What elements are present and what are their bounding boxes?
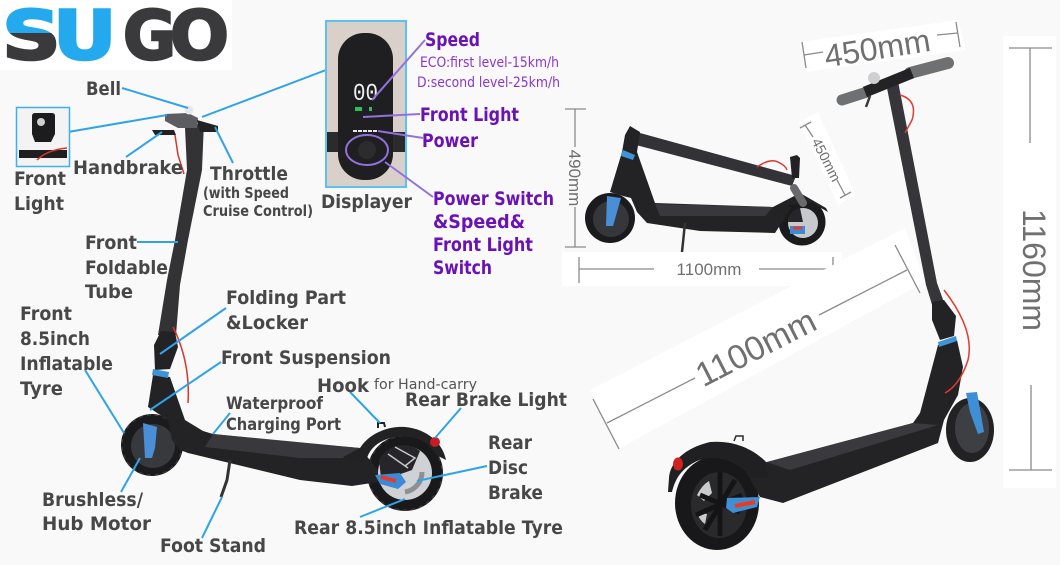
labels: parts: Front — [20, 303, 72, 325]
labels: parts: Light — [14, 193, 64, 215]
stem — [885, 76, 945, 308]
labels: parts: &Locker — [226, 312, 309, 334]
labels: parts: Rear 8.5inch Inflatable Tyre — [294, 517, 563, 539]
labels: parts: Displayer — [321, 191, 413, 213]
labels: displayer functions: &Speed& — [433, 211, 525, 233]
front fork — [143, 423, 157, 458]
dimension: handlebar width 450mm — [800, 20, 966, 74]
frame and deck — [745, 340, 963, 503]
labels: parts: Foldable — [85, 257, 168, 279]
labels: displayer functions — [417, 29, 560, 279]
kick stand — [221, 460, 230, 497]
handlebar — [152, 106, 218, 135]
labels: parts: Hook — [317, 375, 369, 397]
dimension: folded height 490mm: 490mm — [565, 150, 584, 206]
labels: displayer functions: D:second level-25km/h — [417, 75, 560, 91]
blue band — [938, 336, 957, 347]
folded scooter — [562, 126, 842, 286]
hook — [734, 436, 743, 441]
dimension: folded height 490mm — [565, 109, 586, 247]
dimension: handlebar width 450mm: 450mm — [822, 22, 933, 74]
front wheel — [121, 414, 183, 476]
rear wheel — [367, 435, 443, 511]
panel: displayer: 00 — [353, 81, 378, 108]
labels: displayer functions: Front Light — [420, 104, 519, 126]
red cable — [900, 95, 969, 393]
labels: parts — [14, 78, 567, 557]
large scooter — [668, 63, 994, 550]
folding joint — [932, 300, 956, 340]
rear wheel — [675, 456, 759, 550]
dimension: overall length 1100mm — [590, 228, 925, 449]
blue leader lines — [68, 70, 487, 538]
dimension: folded length 1100mm — [579, 257, 833, 283]
hook — [378, 423, 385, 428]
dimension: folded length 1100mm: 1100mm — [677, 260, 741, 279]
labels: parts: Front Suspension — [221, 347, 391, 369]
labels: parts: Tube — [85, 281, 133, 303]
rear fender — [343, 427, 446, 462]
frame and deck — [148, 375, 378, 486]
logo: SUGO — [0, 0, 232, 76]
labels: parts: 8.5inch — [20, 328, 90, 350]
rear arm — [375, 473, 406, 489]
labels: parts: Waterproof — [226, 394, 324, 414]
rear blue arm — [726, 497, 760, 513]
dimension: overall height 1160mm: 1160mm — [1016, 209, 1052, 331]
labels: parts: Front — [14, 168, 66, 190]
labels: displayer functions: Power — [422, 130, 479, 152]
labels: parts: Brushless/ — [42, 489, 143, 511]
labels: parts: Throttle — [210, 163, 288, 185]
panel: displayer — [326, 21, 406, 187]
labels: parts: Inflatable — [20, 353, 113, 375]
labels: parts: Rear Brake Light — [405, 389, 567, 411]
stem — [158, 122, 204, 335]
labels: displayer functions: Speed — [425, 29, 480, 51]
main scooter with callouts — [121, 106, 446, 511]
folding joint — [154, 331, 178, 370]
handlebar — [842, 63, 948, 107]
labels: parts: Rear — [488, 432, 533, 454]
inset: front light — [16, 108, 70, 166]
dimension: overall height 1160mm — [1003, 36, 1056, 488]
rear fender — [668, 442, 768, 492]
front wheel — [946, 398, 994, 462]
rear tail light — [673, 458, 683, 470]
labels: parts: Cruise Control) — [203, 202, 313, 220]
labels: parts: Handbrake — [73, 157, 183, 179]
labels: parts: Bell — [86, 78, 121, 100]
labels: parts: (with Speed — [203, 184, 289, 202]
labels: parts: Charging Port — [226, 415, 341, 435]
dimension: folded handlebar 450mm — [799, 112, 856, 205]
labels: displayer functions: Power Switch — [433, 188, 554, 210]
red cable — [173, 135, 188, 403]
labels: parts: Front — [85, 232, 137, 254]
blue band — [152, 369, 169, 378]
blue fork — [966, 392, 984, 434]
labels: displayer functions: Front Light — [433, 234, 533, 256]
dimension: overall length 1100mm: 1100mm — [690, 302, 822, 395]
labels: parts: Disc — [488, 457, 528, 479]
labels: parts: Foot Stand — [160, 535, 266, 557]
labels: parts: Brake — [488, 482, 543, 504]
labels: parts: Folding Part — [226, 287, 346, 309]
labels: displayer functions: ECO:first level-15km/h — [420, 55, 559, 71]
dimension: folded handlebar 450mm: 450mm — [809, 135, 844, 184]
labels: parts: Tyre — [20, 378, 63, 400]
labels: parts: Hub Motor — [42, 513, 152, 535]
purple leader lines — [363, 40, 433, 197]
rear light — [430, 437, 440, 447]
labels: parts: for Hand-carry — [374, 377, 477, 393]
labels: displayer functions: Switch — [433, 257, 492, 279]
